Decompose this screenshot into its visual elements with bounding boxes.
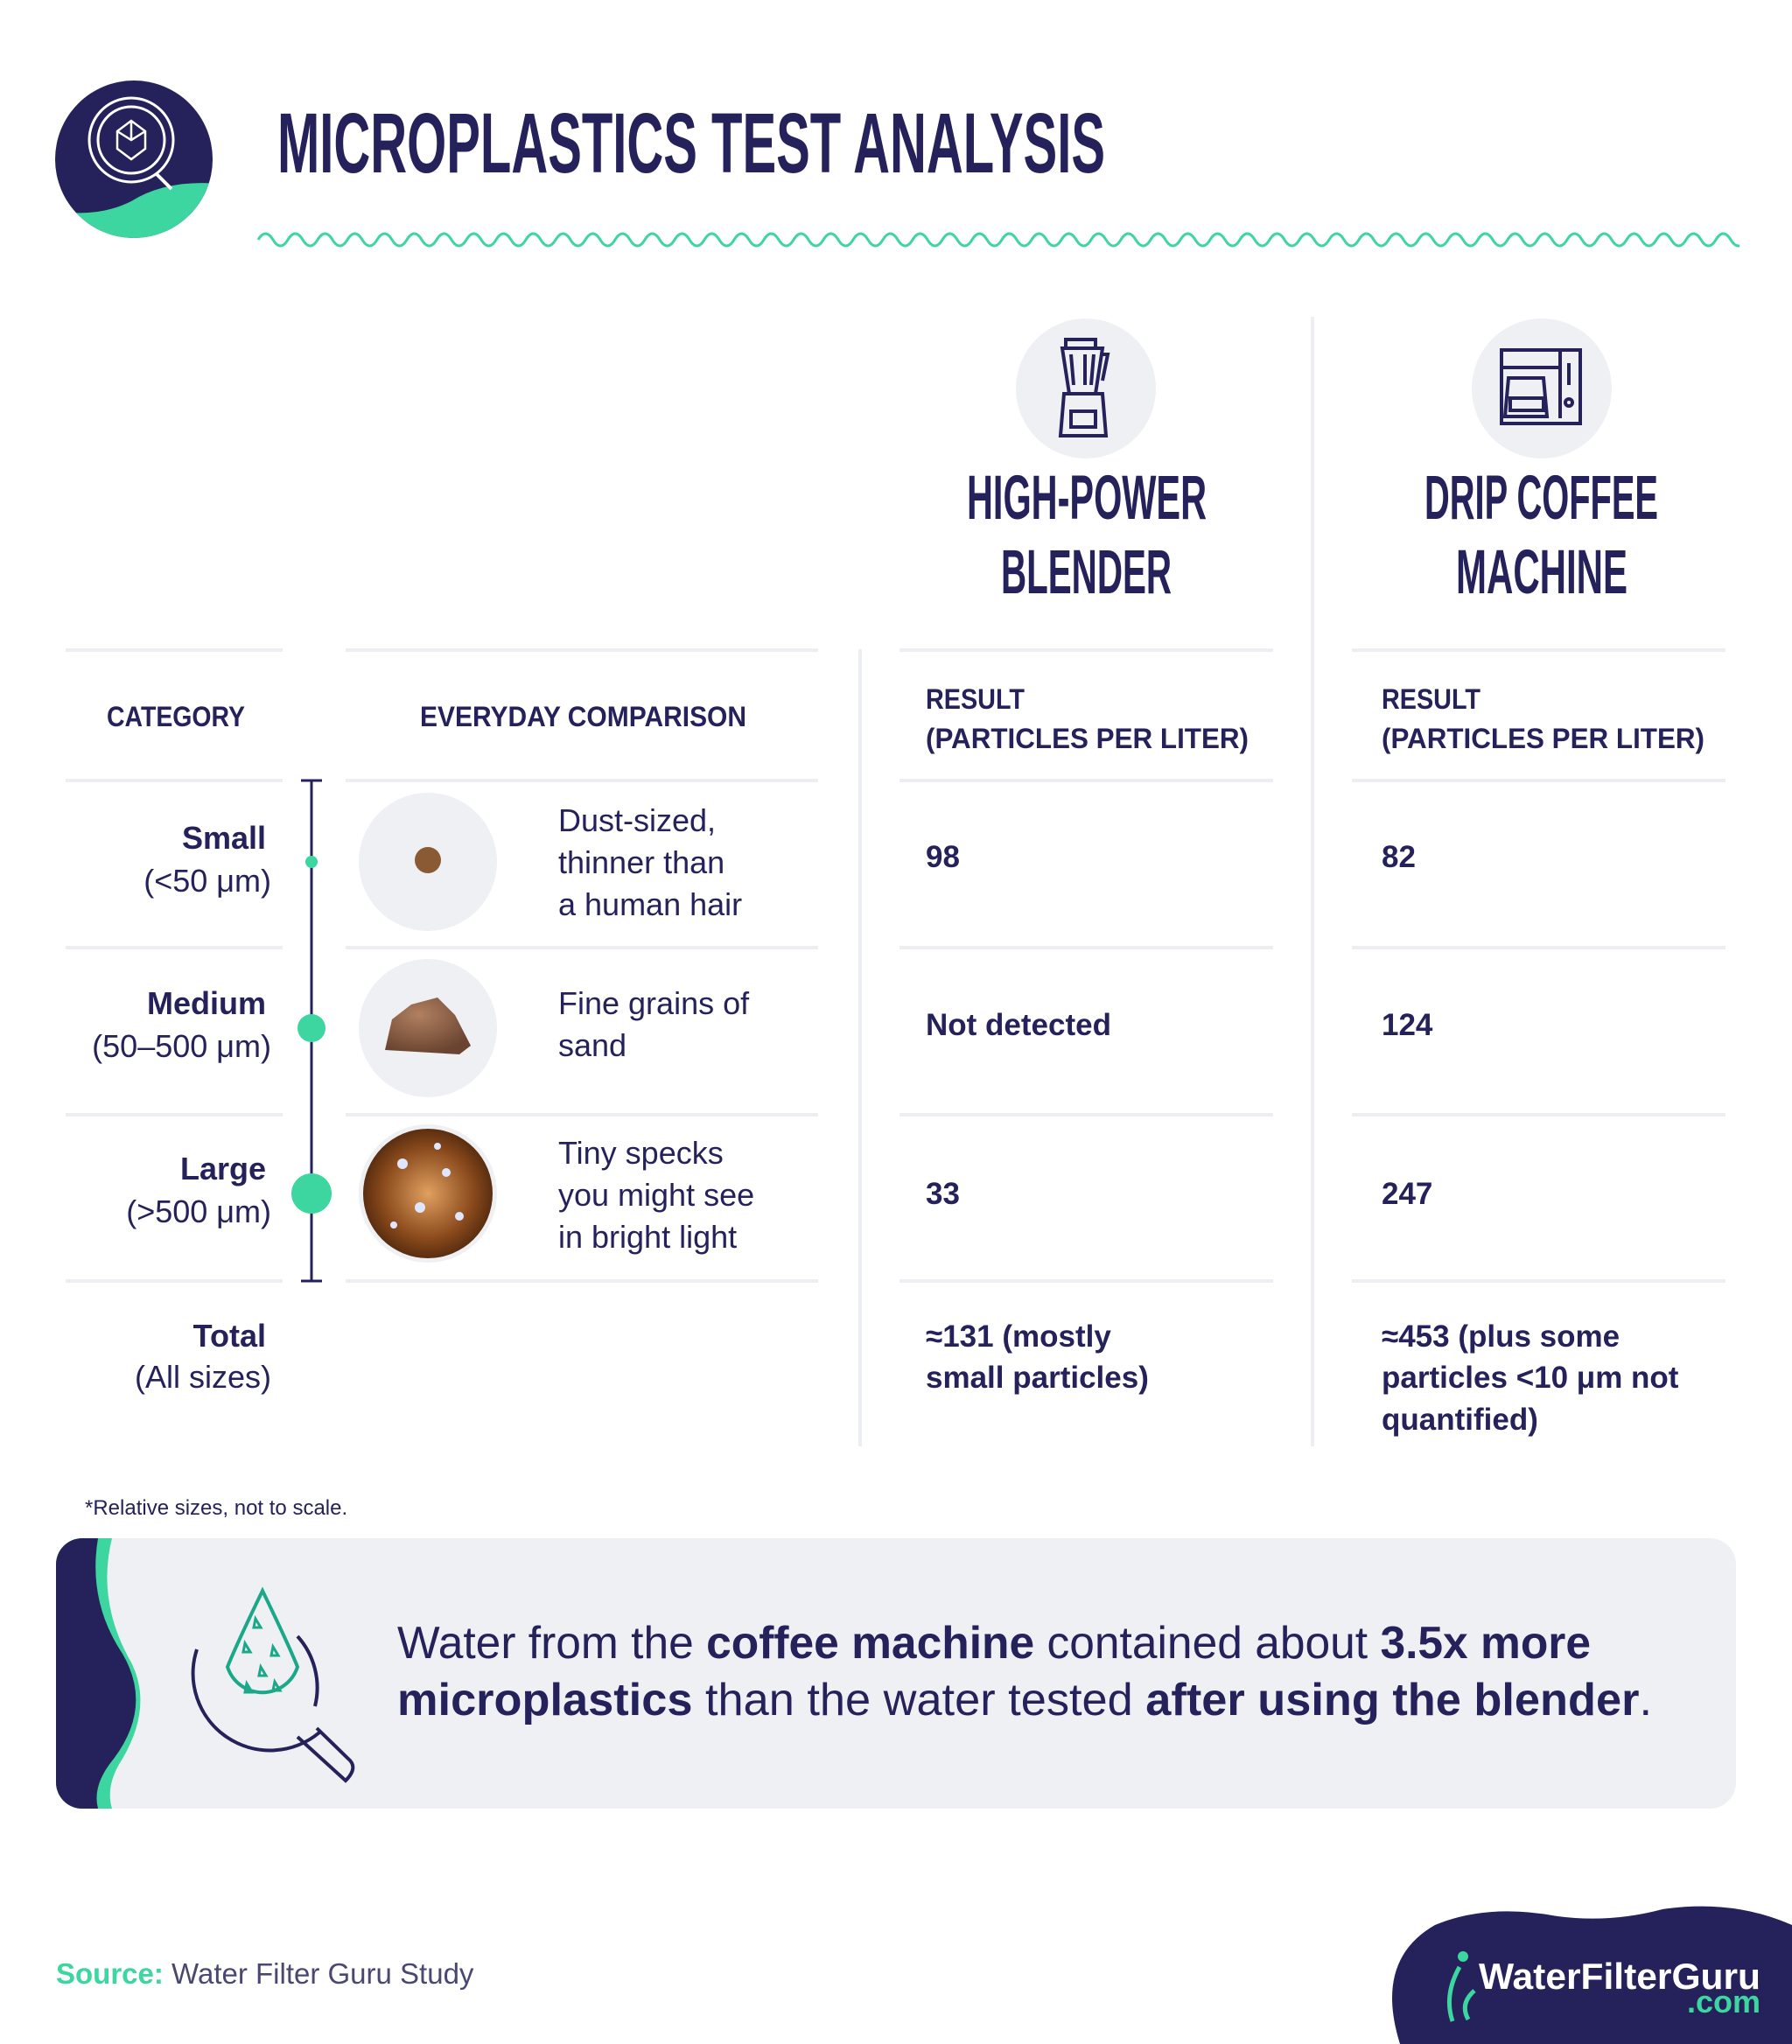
category labels: (50–500 μm) xyxy=(92,1028,271,1064)
blender results: 98 xyxy=(926,840,960,874)
comparison: dust xyxy=(359,793,497,931)
category labels: (<50 μm) xyxy=(144,863,271,899)
table header row: EVERYDAY COMPARISON xyxy=(420,701,746,732)
comparison texts: you might see xyxy=(558,1177,754,1213)
table header row: CATEGORY xyxy=(107,701,245,732)
comparison: sand xyxy=(359,959,497,1097)
size timeline xyxy=(291,780,332,1281)
coffee machine results xyxy=(1382,840,1679,1437)
heading: high-power blender: HIGH-POWER xyxy=(967,464,1207,533)
table header row: (PARTICLES PER LITER) xyxy=(926,723,1249,754)
icon: blender xyxy=(1016,318,1156,458)
footnote: *Relative sizes, not to scale. xyxy=(85,1496,347,1520)
blender results: small particles) xyxy=(926,1361,1149,1395)
category labels: Small xyxy=(182,820,266,856)
table header row: RESULT xyxy=(926,683,1025,715)
comparison texts xyxy=(558,802,754,1255)
callout panel xyxy=(56,1538,1736,1809)
category labels: Large xyxy=(180,1151,266,1186)
comparison texts: Dust-sized, xyxy=(558,802,716,838)
blender results: Not detected xyxy=(926,1008,1111,1042)
callout text: microplastics than the water tested after using the blender. xyxy=(397,1675,1652,1726)
coffee machine results: quantified) xyxy=(1382,1403,1538,1437)
heading: drip coffee machine xyxy=(1424,464,1658,607)
category labels xyxy=(92,820,271,1395)
heading: drip coffee machine: MACHINE xyxy=(1456,538,1628,607)
category labels: (>500 μm) xyxy=(126,1194,271,1229)
brand logo: WaterFilterGuru xyxy=(1479,1956,1760,1997)
table header row xyxy=(107,683,1704,754)
comparison texts: Fine grains of xyxy=(558,985,750,1021)
table header row: (PARTICLES PER LITER) xyxy=(1382,723,1704,754)
coffee machine results: particles <10 μm not xyxy=(1382,1361,1679,1395)
comparison texts: sand xyxy=(558,1027,626,1063)
comparison texts: in bright light xyxy=(558,1219,737,1255)
icon: water drop magnifier xyxy=(193,1591,353,1781)
source: Source: Water Filter Guru Study xyxy=(56,1957,474,1990)
blender results xyxy=(926,840,1149,1395)
blender results: ≈131 (mostly xyxy=(926,1320,1111,1354)
icon: coffee machine xyxy=(1472,318,1612,458)
blender results: 33 xyxy=(926,1177,960,1211)
brand logo: .com xyxy=(1687,1984,1760,2020)
comparison texts: thinner than xyxy=(558,844,724,880)
coffee machine results: 82 xyxy=(1382,840,1416,874)
category labels: Total xyxy=(193,1318,266,1354)
coffee machine results: ≈453 (plus some xyxy=(1382,1320,1620,1354)
table header row: RESULT xyxy=(1382,683,1480,715)
heading: high-power blender xyxy=(967,464,1207,607)
category labels: (All sizes) xyxy=(135,1359,271,1395)
column separators xyxy=(860,317,1312,1446)
logo icon: magnifier circle xyxy=(55,80,213,238)
comparison texts: a human hair xyxy=(558,886,742,922)
heading: high-power blender: BLENDER xyxy=(1001,538,1172,607)
category labels: Medium xyxy=(147,985,266,1021)
brand logo xyxy=(1392,1907,1792,2044)
coffee machine results: 124 xyxy=(1382,1008,1433,1042)
coffee machine results: 247 xyxy=(1382,1177,1432,1211)
table row lines xyxy=(66,650,1726,1281)
title: MICROPLASTICS TEST ANALYSIS xyxy=(277,95,1105,191)
comparison texts: Tiny specks xyxy=(558,1135,724,1171)
wavy divider xyxy=(258,234,1790,246)
callout text: Water from the coffee machine contained about 3.5x more xyxy=(397,1618,1591,1669)
callout text xyxy=(397,1618,1652,1726)
comparison: specks xyxy=(359,1124,497,1263)
